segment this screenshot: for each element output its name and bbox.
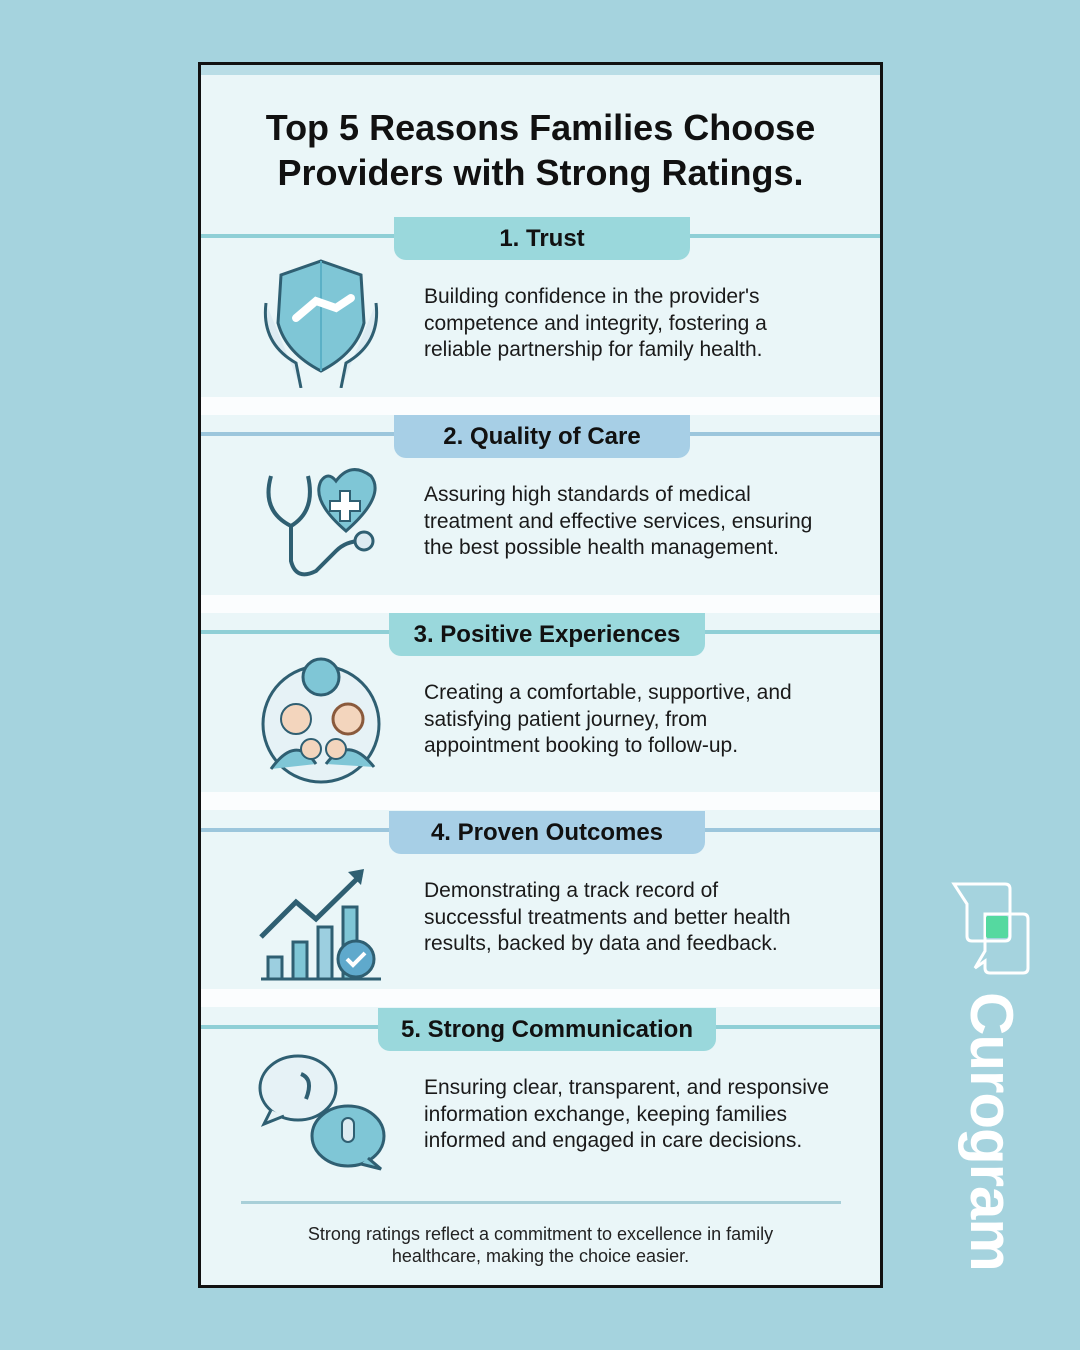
text: experiences bbox=[424, 681, 792, 757]
heading: trust bbox=[394, 217, 690, 260]
text: trust: Building confidence in the provider's bbox=[424, 285, 760, 308]
text: quality: Assuring high standards of medical bbox=[424, 483, 751, 506]
heading: experiences bbox=[389, 613, 705, 656]
title: Providers with Strong Ratings. bbox=[277, 152, 804, 193]
text: outcomes: successful treatments and better health bbox=[424, 906, 791, 928]
text: communication: Ensuring clear, transparent, and responsive bbox=[424, 1076, 829, 1099]
footer text bbox=[308, 1224, 774, 1266]
heading: communication: 5. Strong Communication bbox=[401, 1016, 693, 1043]
icon: stethoscope heart bbox=[266, 468, 377, 576]
heading: communication bbox=[378, 1008, 716, 1051]
icon: speech bubbles bbox=[258, 1054, 386, 1170]
heading: trust: 1. Trust bbox=[499, 225, 585, 252]
logo text: Curogram bbox=[958, 992, 1025, 1271]
icon: hands shield bbox=[264, 259, 378, 388]
panel: communication bbox=[201, 1008, 880, 1170]
text: communication bbox=[424, 1076, 829, 1152]
footer text: Strong ratings reflect a commitment to excellence in family bbox=[308, 1224, 773, 1244]
heading: experiences: 3. Positive Experiences bbox=[414, 621, 680, 648]
icon: chart bbox=[259, 869, 381, 980]
text: outcomes: Demonstrating a track record of bbox=[424, 879, 718, 902]
heading: quality: 2. Quality of Care bbox=[443, 423, 641, 450]
title bbox=[266, 107, 815, 193]
text: trust: competence and integrity, fostering a bbox=[424, 312, 767, 334]
text: quality: treatment and effective services, ensuring bbox=[424, 510, 812, 532]
heading: outcomes: 4. Proven Outcomes bbox=[431, 819, 663, 846]
text: trust: reliable partnership for family health. bbox=[424, 338, 763, 361]
heading: outcomes bbox=[389, 811, 705, 854]
text: outcomes: results, backed by data and feedback. bbox=[424, 932, 778, 955]
panel: quality bbox=[201, 415, 880, 576]
icon: logo bubbles bbox=[951, 882, 1030, 974]
text: communication: information exchange, keeping families bbox=[424, 1102, 787, 1126]
text: trust bbox=[424, 285, 767, 361]
panel: outcomes bbox=[201, 811, 880, 980]
text: quality: the best possible health management. bbox=[424, 536, 779, 559]
text: experiences: Creating a comfortable, supportive, and bbox=[424, 681, 792, 704]
panel: experiences bbox=[201, 613, 880, 784]
footer text: healthcare, making the choice easier. bbox=[392, 1246, 689, 1266]
icon: family bbox=[262, 658, 380, 784]
text: experiences: satisfying patient journey, from bbox=[424, 708, 707, 730]
card bbox=[198, 62, 883, 1288]
text: experiences: appointment booking to follow-up. bbox=[424, 734, 738, 757]
text: outcomes bbox=[424, 879, 791, 955]
logo: curogram bbox=[951, 882, 1030, 1271]
text: communication: informed and engaged in care decisions. bbox=[424, 1129, 802, 1152]
title: Top 5 Reasons Families Choose bbox=[266, 107, 815, 148]
heading: quality bbox=[394, 415, 690, 458]
panel: trust bbox=[201, 217, 880, 388]
text: quality bbox=[424, 483, 812, 559]
